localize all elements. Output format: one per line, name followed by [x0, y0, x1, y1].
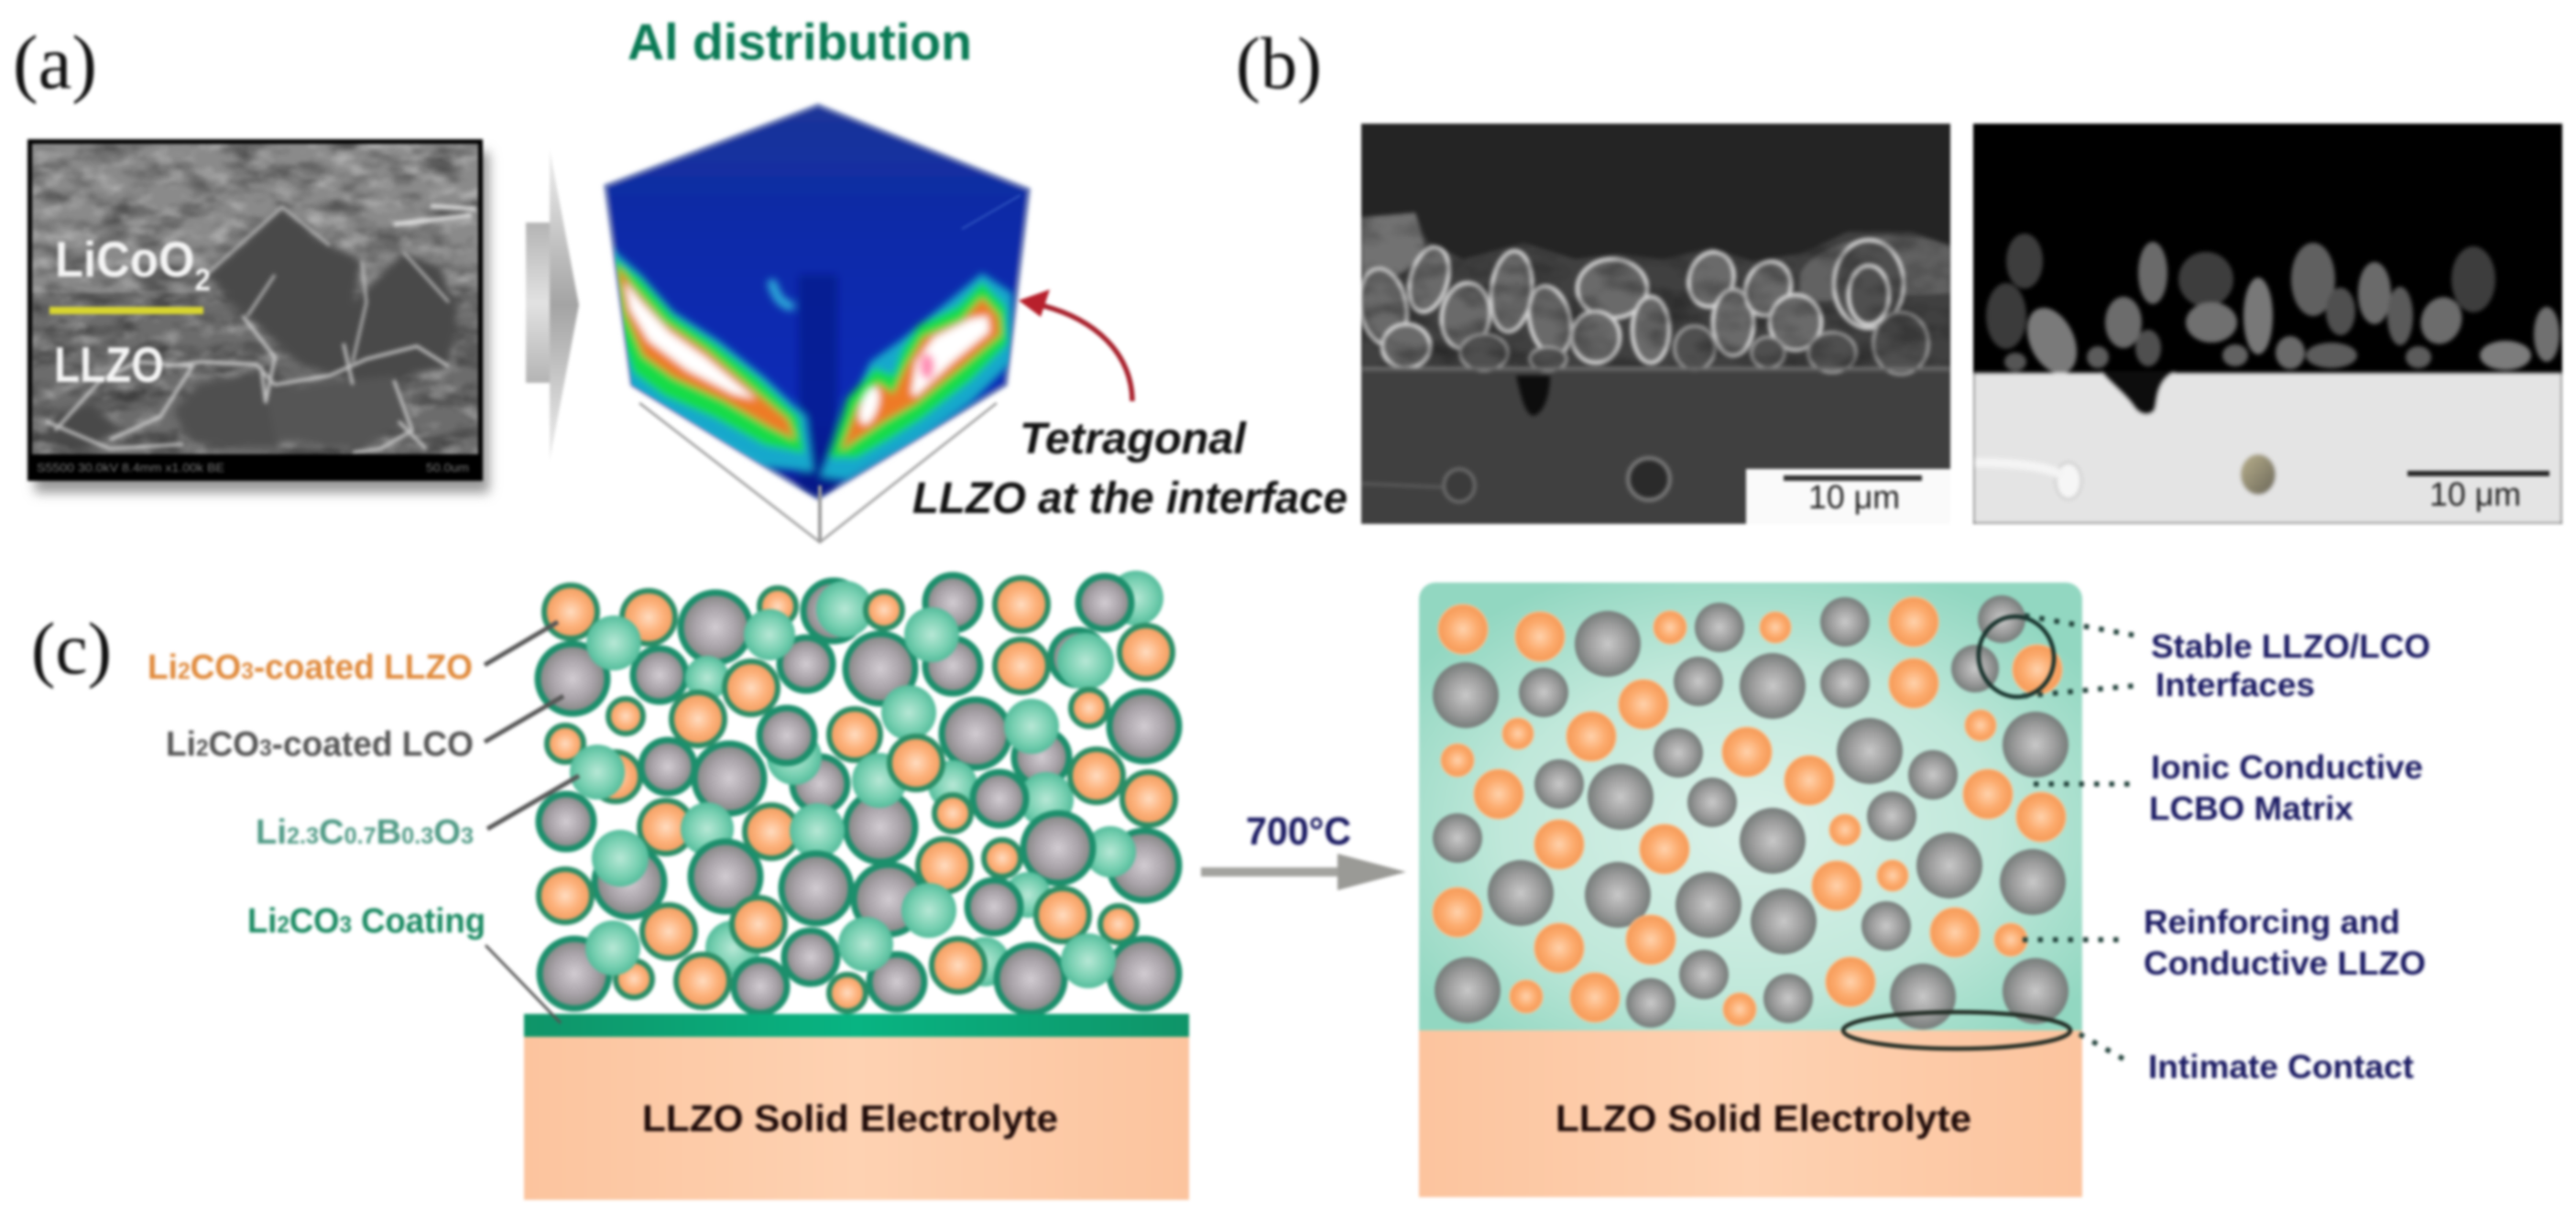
callout: Reinforcing and Conductive LLZO: Conductive LLZO: [2144, 944, 2426, 982]
SEM scale text: 50.0um: [426, 462, 469, 474]
arrow: red curved arrow to interface: [1019, 289, 1132, 401]
chart: 3D Al distribution cube: [605, 105, 1035, 550]
scale: 10 µm (right image): 10 μm: [2429, 475, 2521, 513]
callout: Stable LLZO/LCO Interfaces: Interfaces: [2156, 666, 2315, 703]
highlight ring: LLZO/LCO interface: [1971, 609, 2061, 704]
callout: Reinforcing and Conductive LLZO: Reinforcing and: [2144, 903, 2400, 941]
sintered particles: [1433, 595, 2068, 1029]
scale: 10 µm (right image): [2407, 471, 2549, 513]
annotation: Tetragonal LLZO at the interface: LLZO at the interface: [912, 474, 1348, 523]
panel: BSE image of cathode film on LLZO: [1973, 124, 2562, 524]
label: LiCoO2: LiCoO: [55, 231, 206, 288]
callout: Ionic Conductive LCBO Matrix: Ionic Conductive: [2151, 748, 2423, 786]
Li2CO3 coating layer: [524, 1014, 1189, 1037]
annotation: Tetragonal LLZO at the interface: Tetragonal: [1020, 415, 1248, 463]
arrow: sintering step: [1201, 854, 1406, 890]
leader lines: [485, 622, 579, 1023]
highlight ring: intimate contact: [1843, 1012, 2070, 1049]
label: 700°C: 700°C: [1246, 810, 1351, 854]
left heat band: [608, 245, 813, 472]
callout: Intimate Contact: Intimate Contact: [2148, 1048, 2414, 1085]
yellow interface line: [49, 307, 203, 314]
coated particle mix: [538, 571, 1179, 1013]
legend: Li2.3C0.7B0.3O3: Li2.3C0.7B0.3O3: [256, 813, 474, 852]
diagram: electrolyte stack after sintering: [1419, 583, 2082, 1197]
dotted callout lines: [2023, 615, 2142, 1062]
diagram: electrolyte stack before sintering: [524, 571, 1189, 1200]
electrolyte label: LLZO Solid Electrolyte: [1555, 1097, 1971, 1139]
panel: SE image of cathode film on LLZO: [1354, 124, 1950, 524]
callout: Ionic Conductive LCBO Matrix: [2149, 748, 2423, 827]
label (c): (c): [31, 609, 112, 690]
callout: Stable LLZO/LCO Interfaces: Stable LLZO/LCO: [2151, 627, 2430, 665]
callout: Stable LLZO/LCO Interfaces: [2151, 627, 2430, 703]
legend: Li2CO3-coated LLZO: Li2CO3-coated LLZO: [147, 648, 473, 687]
electrolyte label: LLZO Solid Electrolyte: [642, 1097, 1058, 1139]
label: LLZO: LLZO: [54, 336, 164, 393]
scale box: 10 µm (left image): [1746, 469, 1950, 524]
annotation: Tetragonal LLZO at the interface: [912, 415, 1348, 523]
label (b): (b): [1236, 24, 1322, 104]
legend: Li2CO3-coated LCO: Li2CO3-coated LCO: [166, 725, 474, 764]
SEM caption: S5500 30.0kV 8.4mm x1.00k BE: [37, 462, 224, 474]
panel: SEM cross-section of LiCoO2 on LLZO: [27, 139, 489, 493]
callout: Reinforcing and Conductive LLZO: [2144, 903, 2426, 982]
arrow: gray chevron from SEM to cube: [526, 149, 579, 461]
scale box: 10 µm (left image): 10 μm: [1808, 478, 1900, 516]
legend: Li2CO3 Coating: Li2CO3 Coating: [247, 902, 486, 941]
LLZO solid electrolyte block: [524, 1037, 1189, 1200]
heading: Al distribution: Al distribution: [628, 13, 972, 71]
LCBO matrix: [1419, 583, 2082, 1031]
LLZO solid electrolyte block: [1419, 1030, 2082, 1197]
label: LiCoO2: 2: [195, 263, 211, 298]
right heat band: [820, 273, 1012, 481]
label (a): (a): [13, 20, 97, 105]
callout: Ionic Conductive LCBO Matrix: LCBO Matrix: [2149, 790, 2353, 827]
